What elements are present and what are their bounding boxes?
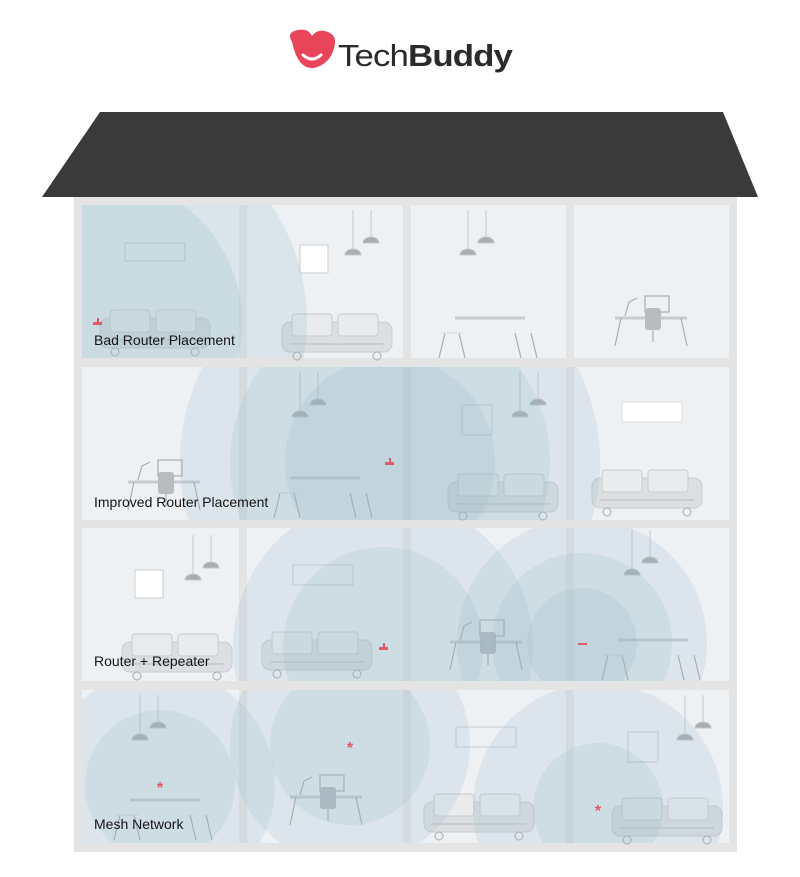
house walls [74, 197, 737, 852]
logo text: Tech Buddy [338, 38, 514, 73]
roof [42, 112, 758, 197]
logo [290, 30, 514, 73]
mesh nodes: * [157, 780, 164, 797]
signal: bad placement [82, 205, 307, 358]
labels: Router + Repeater [94, 653, 210, 669]
mesh nodes: * [347, 740, 354, 757]
routers [93, 318, 587, 650]
labels: Mesh Network [94, 816, 184, 832]
icon: logo heart [290, 30, 335, 68]
labels [94, 332, 268, 832]
furniture [100, 210, 722, 844]
signal: mesh [82, 690, 723, 843]
mesh nodes [157, 740, 602, 820]
signal: router + repeater [233, 528, 707, 681]
mesh nodes: * [595, 803, 602, 820]
labels: Bad Router Placement [94, 332, 235, 348]
signal: improved placement [180, 367, 600, 520]
labels: Improved Router Placement [94, 494, 268, 510]
